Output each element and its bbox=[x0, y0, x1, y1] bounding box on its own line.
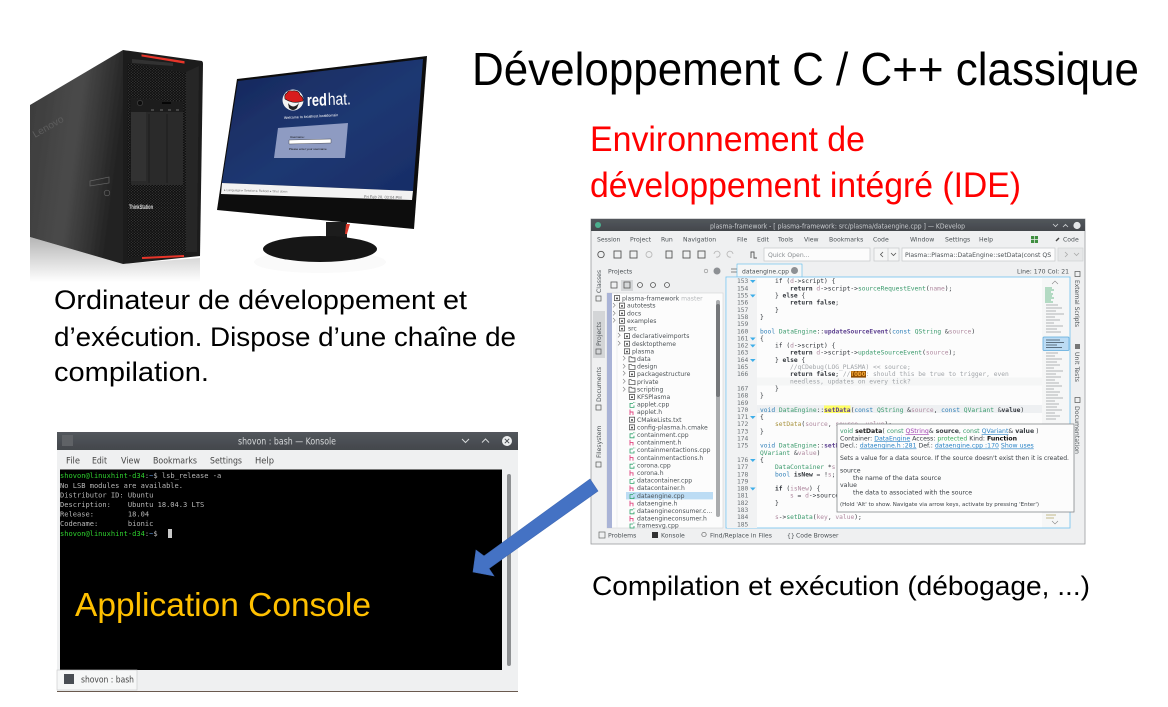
code editor: 169 bbox=[737, 400, 749, 407]
documentation tooltip: value bbox=[840, 482, 857, 489]
code editor: 168 bbox=[737, 393, 749, 400]
Projects panel: docs bbox=[627, 310, 641, 317]
terminal menu bar: Edit bbox=[92, 456, 107, 466]
title: Développement C / C++ classique bbox=[472, 43, 1139, 95]
Projects panel: examples bbox=[627, 318, 656, 325]
code editor: } else { bbox=[775, 357, 805, 364]
terminal screen: Codename: bionic bbox=[60, 519, 153, 528]
icon: monitor with Red Hat login: Welcome to localhost.localdomain bbox=[284, 113, 338, 120]
Projects panel: private bbox=[637, 379, 659, 386]
panel: KDevelop IDE window bbox=[591, 219, 1085, 544]
Projects panel: plasma-framework master bbox=[622, 295, 703, 302]
code editor: 179 bbox=[737, 478, 749, 485]
code editor: QVariant &value) bbox=[760, 450, 820, 457]
IDE menu bar: Edit bbox=[757, 236, 769, 244]
terminal title bar: shovon : bash — Konsole bbox=[238, 436, 336, 448]
arrow: IDE to console bbox=[473, 479, 598, 576]
code editor: 178 bbox=[737, 471, 749, 478]
IDE menu bar: File bbox=[737, 236, 747, 244]
IDE left side tabs: Projects bbox=[596, 322, 603, 346]
IDE menu bar: Navigation bbox=[683, 236, 716, 244]
Projects panel: framesvg.cpp bbox=[637, 523, 679, 530]
text: computer description: d’exécution. Dispose d’une chaîne de bbox=[54, 322, 516, 352]
Projects panel: dataengineconsumer.c... bbox=[637, 508, 712, 515]
icon: monitor with Red Hat login: Username: bbox=[290, 135, 305, 139]
panel: Konsole terminal window bbox=[57, 432, 518, 692]
terminal screen: shovon@linuxhint-d34:~$ lsb_release -a bbox=[60, 471, 221, 480]
code editor: 171 bbox=[737, 414, 749, 421]
code editor: return d->script->updateSourceEvent(source); bbox=[790, 350, 956, 357]
Projects panel: desktoptheme bbox=[632, 341, 676, 348]
icon: monitor with Red Hat login: ▸ Language ▸ Session ▸ Reboot ▸ Shut down bbox=[224, 188, 288, 194]
heading: IDE: développement intégré (IDE) bbox=[590, 166, 1021, 205]
terminal screen: Distributor ID: Ubuntu bbox=[60, 490, 153, 499]
IDE left side tabs: Filesystem bbox=[596, 426, 603, 458]
terminal tab bbox=[57, 670, 137, 690]
code editor: } bbox=[760, 314, 764, 321]
Projects panel: dataengine.h bbox=[637, 500, 677, 507]
documentation tooltip: the name of the data source bbox=[853, 475, 941, 482]
code editor: 161 bbox=[737, 335, 749, 342]
code editor: 175 bbox=[737, 443, 749, 450]
heading: IDE bbox=[590, 120, 1021, 205]
terminal menu bar: Help bbox=[255, 456, 274, 466]
text: computer description: compilation. bbox=[54, 357, 209, 387]
icon: workstation tower: Lenovo bbox=[31, 114, 66, 141]
IDE menu bar: Session bbox=[597, 236, 621, 244]
code editor: } bbox=[760, 428, 764, 435]
code editor: } bbox=[775, 385, 779, 392]
Projects panel bbox=[607, 268, 723, 530]
terminal screen bbox=[60, 470, 502, 670]
IDE left side tabs: Documents bbox=[596, 367, 603, 402]
Projects panel: plasma bbox=[632, 348, 654, 355]
documentation tooltip: source bbox=[840, 468, 861, 474]
IDE bottom tool bar: Konsole bbox=[661, 532, 685, 540]
terminal menu bar: Settings bbox=[210, 456, 242, 466]
code editor: return false; bbox=[790, 300, 839, 307]
documentation tooltip: void setData( const QString& source, const QVariant& value ) bbox=[840, 428, 1039, 435]
icon: monitor with Red Hat login: red bbox=[307, 90, 327, 110]
code editor: { bbox=[760, 457, 764, 464]
terminal screen: No LSB modules are available. bbox=[60, 481, 183, 490]
code editor: bool DataEngine::updateSourceEvent(const QString &source) bbox=[760, 328, 975, 335]
terminal menu bar: File bbox=[66, 456, 80, 466]
code editor: return d->script->sourceRequestEvent(name); bbox=[790, 285, 952, 292]
code editor: 162 bbox=[737, 343, 749, 350]
code editor: 163 bbox=[737, 350, 749, 357]
code editor: } else { bbox=[775, 292, 805, 300]
code editor: 173 bbox=[737, 428, 749, 435]
code editor: 167 bbox=[737, 385, 749, 392]
Projects panel: containmentactions.cpp bbox=[637, 447, 711, 454]
Projects panel: CMakeLists.txt bbox=[637, 417, 682, 424]
code editor: 165 bbox=[737, 364, 749, 371]
Projects panel: src bbox=[628, 326, 637, 333]
code editor: 181 bbox=[737, 493, 749, 500]
Projects panel: scripting bbox=[637, 386, 664, 393]
Projects panel: corona.h bbox=[637, 470, 664, 477]
Projects panel: dataengineconsumer.h bbox=[637, 516, 707, 523]
Projects panel: packagestructure bbox=[637, 371, 691, 378]
IDE menu bar: Code bbox=[1063, 236, 1079, 244]
code editor: bool isNew = !s; bbox=[775, 470, 835, 478]
terminal screen: Description: Ubuntu 18.04.3 LTS bbox=[60, 500, 204, 509]
IDE right side tabs: Unit Tests bbox=[1073, 352, 1080, 382]
documentation tooltip: the data to associated with the source bbox=[853, 490, 972, 496]
code editor: if (isNew) { bbox=[775, 485, 821, 493]
code editor: { bbox=[760, 414, 764, 421]
icon: monitor with Red Hat login: Please enter your username bbox=[289, 147, 327, 151]
IDE toolbar bbox=[598, 248, 1083, 261]
terminal menu bar: View bbox=[121, 456, 140, 466]
editor tab bar: Line: 170 Col: 21 bbox=[1017, 268, 1069, 275]
code editor: needless, updates on every tick? bbox=[790, 378, 911, 385]
terminal screen: Release: 18.04 bbox=[60, 510, 149, 519]
code editor: 157 bbox=[737, 307, 749, 314]
terminal scrollbar bbox=[507, 474, 511, 666]
code editor: 180 bbox=[737, 486, 749, 493]
documentation tooltip: Container: DataEngine Access: protected Kind: Function bbox=[840, 435, 1017, 442]
IDE menu bar: Tools bbox=[777, 236, 793, 244]
IDE left side tabs: Classes bbox=[596, 270, 603, 293]
IDE menu bar: View bbox=[804, 236, 819, 244]
code editor: 177 bbox=[737, 464, 749, 471]
code editor: 170 bbox=[737, 407, 749, 414]
code editor: } bbox=[760, 393, 764, 400]
Projects panel: containmentactions.h bbox=[637, 455, 703, 462]
Projects panel: containment.h bbox=[637, 440, 681, 447]
Projects panel: config-plasma.h.cmake bbox=[637, 424, 708, 431]
Projects panel: dataengine.cpp bbox=[637, 493, 685, 500]
IDE menu bar: Settings bbox=[945, 236, 970, 244]
Projects panel: datacontainer.cpp bbox=[637, 478, 692, 485]
Projects panel: corona.cpp bbox=[637, 462, 671, 469]
IDE bottom tool bar: {} bbox=[787, 532, 795, 540]
IDE menu bar: Help bbox=[979, 236, 993, 244]
code editor: 158 bbox=[737, 314, 749, 321]
IDE menu bar: Code bbox=[873, 236, 889, 244]
code editor: setData(source, source, value); bbox=[775, 421, 892, 428]
IDE title bar: plasma-framework - [ plasma-framework: src/plasma/dataengine.cpp ] — KDevelop bbox=[710, 222, 965, 230]
label: Application Console: Application Console bbox=[75, 586, 371, 623]
text: computer description bbox=[54, 285, 516, 387]
code editor: DataContainer *s = d->source(source); bbox=[775, 464, 915, 471]
Projects panel: containment.cpp bbox=[637, 432, 689, 439]
code editor: { bbox=[760, 335, 764, 342]
code editor: void DataEngine::setData(const QString &source) bbox=[760, 443, 937, 450]
IDE toolbar: Quick Open... bbox=[768, 252, 810, 259]
IDE menu bar: Window bbox=[910, 236, 934, 244]
IDE right side tabs: External Scripts bbox=[1073, 280, 1080, 327]
code minimap bbox=[1042, 278, 1070, 528]
documentation tooltip: Decl.: dataengine.h :281 Def.: dataengine.cpp :170 Show uses bbox=[840, 442, 1034, 450]
code editor: 166 bbox=[737, 371, 749, 378]
IDE right side tabs bbox=[1073, 272, 1080, 454]
code editor: 184 bbox=[737, 514, 749, 521]
documentation tooltip bbox=[837, 424, 1074, 512]
IDE bottom tool bar: Code Browser bbox=[796, 532, 839, 540]
IDE bottom tool bar: Find/Replace in Files bbox=[710, 532, 772, 540]
IDE bottom tool bar bbox=[599, 532, 839, 540]
Projects panel: datacontainer.h bbox=[637, 485, 685, 492]
IDE bottom tool bar: Problems bbox=[608, 532, 636, 540]
Projects panel: design bbox=[637, 364, 657, 371]
code editor: 176 bbox=[737, 457, 749, 464]
code editor: 182 bbox=[737, 500, 749, 507]
caption: compilation and execution: Compilation et exécution (débogage, ...) bbox=[592, 571, 1090, 601]
icon: monitor with Red Hat login: Fri Feb 28, 03:04 PM bbox=[364, 194, 402, 200]
Projects panel: autotests bbox=[627, 303, 656, 310]
heading: IDE: Environnement de bbox=[590, 120, 865, 159]
code editor: if (d->script) { bbox=[775, 343, 836, 350]
terminal tab: shovon : bash bbox=[81, 676, 134, 686]
icon: workstation tower bbox=[30, 50, 203, 282]
IDE toolbar: Plasma::Plasma::DataEngine::setData(const QS bbox=[905, 252, 1051, 259]
code editor: 183 bbox=[737, 507, 749, 514]
IDE title bar bbox=[591, 219, 1085, 231]
code editor: 155 bbox=[737, 292, 749, 300]
icon: monitor with Red Hat login: hat. bbox=[328, 89, 351, 109]
IDE menu bar: Project bbox=[630, 236, 652, 244]
IDE menu bar: Bookmarks bbox=[829, 236, 863, 244]
code editor: 154 bbox=[737, 285, 749, 292]
icon: monitor with Red Hat login bbox=[217, 56, 427, 273]
Projects panel: declarativeimports bbox=[632, 333, 689, 340]
terminal screen: shovon@linuxhint-d34:~$ bbox=[60, 529, 158, 538]
code editor: } bbox=[775, 307, 779, 314]
code editor: void DataEngine::setData(const QString &source, const QVariant &value) bbox=[760, 407, 1024, 414]
terminal menu bar bbox=[66, 456, 274, 466]
IDE left side tabs bbox=[593, 270, 605, 467]
code editor: 159 bbox=[737, 321, 749, 328]
terminal title bar bbox=[57, 432, 518, 450]
code editor: s = d->source(source); bbox=[790, 493, 873, 500]
Projects panel: applet.h bbox=[637, 409, 662, 416]
code editor bbox=[726, 277, 1070, 528]
code editor: 185 bbox=[737, 521, 749, 528]
IDE menu bar: Run bbox=[661, 236, 673, 244]
IDE right side tabs: Documentation bbox=[1073, 406, 1080, 454]
code editor: s->setData(key, value); bbox=[775, 514, 862, 521]
IDE menu bar bbox=[597, 236, 1079, 244]
code editor: return false; //TODO: should this be true to trigger, even bbox=[790, 371, 1009, 378]
Projects panel: Projects bbox=[608, 268, 632, 276]
code editor: 160 bbox=[737, 328, 749, 335]
code editor: //qCDebug(LOG_PLASMA) << source; bbox=[790, 364, 911, 371]
Projects panel: applet.cpp bbox=[637, 402, 669, 409]
code editor: 164 bbox=[737, 357, 749, 364]
icon: workstation tower: ThinkStation bbox=[129, 204, 153, 211]
Projects panel: KFSPlasma bbox=[637, 394, 670, 401]
terminal menu bar: Bookmarks bbox=[153, 456, 197, 466]
code editor: } bbox=[775, 500, 779, 507]
Projects panel: data bbox=[637, 356, 651, 363]
code editor: 174 bbox=[737, 436, 749, 442]
text: computer description: Ordinateur de développement et bbox=[54, 285, 468, 315]
code editor: if (d->script) { bbox=[775, 278, 836, 285]
code editor: 153 bbox=[737, 278, 749, 285]
code editor: 172 bbox=[737, 421, 749, 428]
editor tab bar bbox=[731, 264, 1069, 277]
code editor: 156 bbox=[737, 300, 749, 307]
documentation tooltip: Sets a value for a data source. If the source doesn't exist then it is created. bbox=[840, 455, 1069, 462]
documentation tooltip: (Hold 'Alt' to show. Navigate via arrow keys, activate by pressing 'Enter') bbox=[840, 502, 1039, 508]
editor tab bar: dataengine.cpp bbox=[742, 268, 789, 275]
